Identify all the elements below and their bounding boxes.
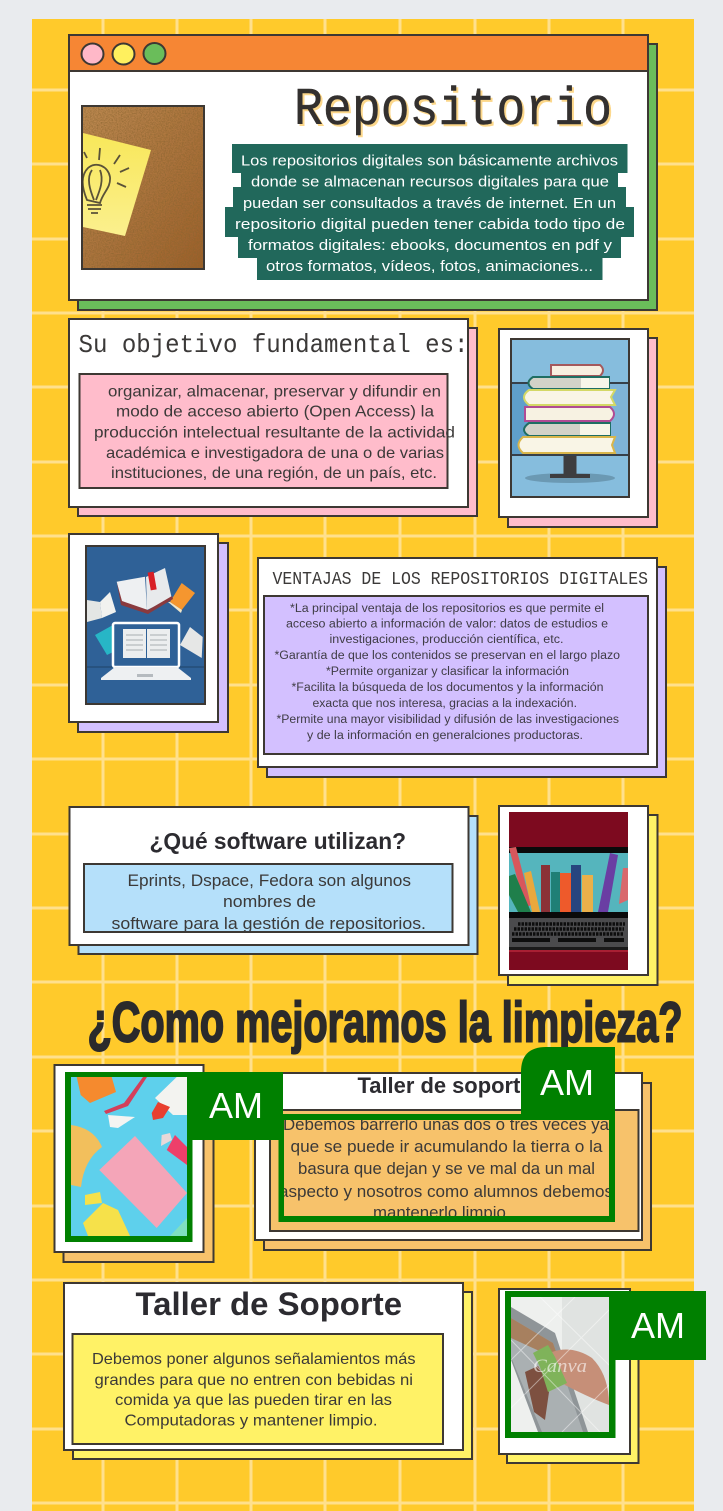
objetivo text box: instituciones, de una región, de un país, etc. — [111, 465, 437, 482]
objetivo text box: académica e investigadora de una o de varias — [106, 445, 444, 462]
title: Repositorio — [294, 80, 612, 140]
AM tag on cleaning products: AM — [209, 1085, 263, 1126]
yellow text box: grandes para que no entren con bebidas ni — [94, 1372, 413, 1389]
heading: objetivo: Su objetivo fundamental es: — [78, 330, 468, 360]
objetivo text box: organizar, almacenar, preservar y difundir en — [108, 384, 441, 401]
heading: taller de soporte: Taller de soporte — [358, 1073, 532, 1098]
ventajas list — [264, 596, 648, 754]
photo card: cleaning products — [54, 1065, 214, 1262]
ventajas list: *Garantía de que los contenidos se preservan en el largo plazo — [274, 650, 620, 662]
ventajas list: investigaciones, producción científica, etc. — [330, 634, 564, 646]
software text box: nombres de — [223, 892, 316, 911]
intro text block: donde se almacenan recursos digitales para que — [251, 174, 609, 191]
objetivo text box — [80, 374, 455, 488]
heading: ventajas: VENTAJAS DE LOS REPOSITORIOS DIGITALES — [272, 570, 648, 590]
orange text box: que se puede ir acumulando la tierra o la — [290, 1137, 603, 1156]
yellow text box — [72, 1334, 443, 1444]
intro text block: otros formatos, vídeos, fotos, animaciones... — [266, 258, 593, 275]
panel: software — [70, 807, 478, 954]
illustration: books on a stand — [511, 339, 629, 497]
panel: taller de soporte (senalamientos) — [64, 1283, 472, 1459]
photo: cleaning products — [71, 1077, 187, 1236]
ventajas list: *Facilita la búsqueda de los documentos y la información — [292, 682, 604, 694]
yellow text box: Debemos poner algunos señalamientos más — [92, 1351, 416, 1368]
intro text block: formatos digitales: ebooks, documentos en pdf y — [248, 237, 613, 254]
objetivo text box: modo de acceso abierto (Open Access) la — [116, 404, 434, 421]
orange text box: Debemos barrerlo unas dos o tres veces ya — [283, 1115, 610, 1134]
panel: ventajas — [258, 558, 666, 777]
AM tag on cleaning products — [192, 1072, 283, 1140]
orange text box — [270, 1110, 638, 1231]
photo card: wiping a screen — [499, 1289, 706, 1463]
illustration: books on laptop screen — [509, 812, 628, 970]
intro text block: Los repositorios digitales son básicamente archivos — [241, 152, 618, 170]
orange text box: basura que dejan y se ve mal da un mal — [298, 1159, 595, 1178]
software text box: software para la gestión de repositorios. — [112, 914, 426, 933]
orange text box: mantenerlo limpio. — [373, 1203, 510, 1222]
yellow text box: comida ya que las pueden tirar en las — [115, 1392, 392, 1409]
ventajas list: *Permite organizar y clasificar la información — [326, 666, 569, 678]
ventajas list: exacta que nos interesa, gracias a la indexación. — [312, 698, 577, 710]
green frame with AM tab — [278, 1047, 615, 1222]
illustration: laptop and open books — [86, 546, 205, 704]
window buttons — [82, 43, 166, 64]
photo: idea note on cork board — [82, 106, 204, 269]
heading: taller de soporte: Taller de Soporte — [136, 1286, 402, 1322]
intro text block: puedan ser consultados a través de internet. En un — [243, 195, 616, 212]
window title bar — [69, 35, 648, 71]
canva watermark: Canva — [533, 1356, 587, 1377]
intro text block: repositorio digital pueden tener cabida todo tipo de — [235, 216, 625, 233]
yellow text box: Computadoras y mantener limpio. — [124, 1412, 378, 1430]
panel: taller de soporte (limpieza) — [255, 1047, 651, 1250]
software text box — [84, 864, 452, 933]
panel: repositorio window — [69, 35, 657, 310]
panel: objetivo fundamental — [69, 319, 477, 516]
heading: software: ¿Qué software utilizan? — [150, 828, 406, 854]
ventajas list: *Permite una mayor visibilidad y difusión de las investigaciones — [276, 714, 619, 726]
green image frame — [505, 1291, 616, 1438]
AM tag: AM — [631, 1305, 685, 1346]
orange text box: aspecto y nosotros como alumnos debemos — [279, 1182, 613, 1201]
photo card: flying books and laptop — [69, 534, 228, 732]
ventajas list: y de la información en generalciones productoras. — [307, 730, 583, 742]
green frame with AM tab: AM — [540, 1062, 594, 1103]
green image frame — [65, 1072, 192, 1242]
photo card: laptop with books — [499, 806, 658, 985]
ventajas list: acceso abierto a información de valor: datos de estudios e — [286, 618, 608, 630]
photo card: stack of books — [499, 329, 657, 527]
photo: hand cleaning a screen — [511, 1297, 609, 1432]
intro text block — [225, 144, 634, 280]
software text box: Eprints, Dspace, Fedora son algunos — [128, 871, 411, 890]
objetivo text box: producción intelectual resultante de la actividad — [94, 425, 455, 442]
ventajas list: *La principal ventaja de los repositorios es que permite el — [290, 603, 604, 615]
AM tag — [609, 1291, 706, 1360]
